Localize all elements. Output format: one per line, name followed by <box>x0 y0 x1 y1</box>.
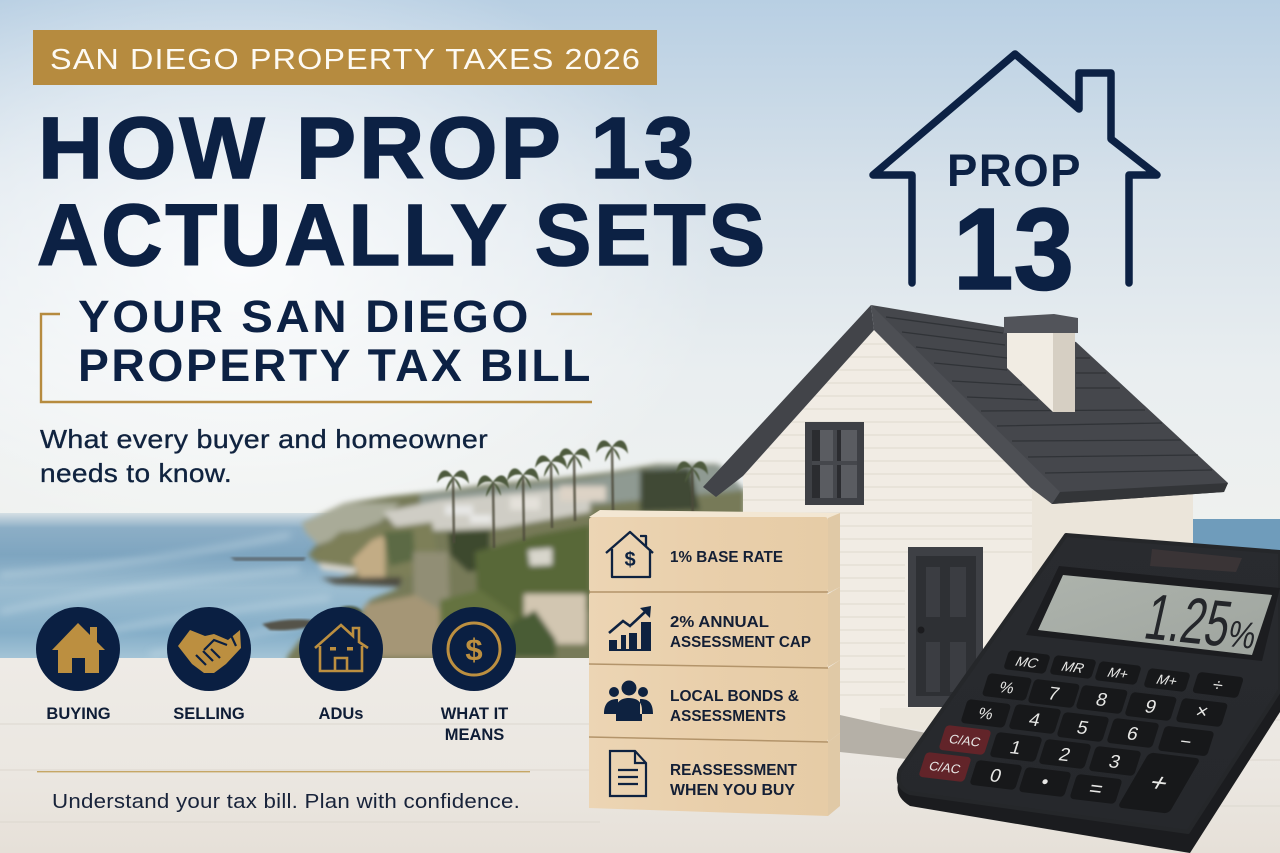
calculator keys: 1 <box>1007 738 1024 759</box>
calculator keys: C/AC <box>947 731 982 749</box>
front gable wall <box>743 330 1032 720</box>
gold bracket with subtitle <box>41 291 593 402</box>
divider <box>37 771 530 772</box>
calculator keys: MR <box>1060 658 1086 676</box>
supporting line <box>40 424 488 488</box>
calculator keys: 5 <box>1074 718 1091 739</box>
title banner: SAN DIEGO PROPERTY TAXES 2026 <box>50 44 641 76</box>
tagline: Understand your tax bill. Plan with confidence. <box>52 791 520 813</box>
gold bracket with subtitle: YOUR SAN DIEGO <box>78 291 531 342</box>
foundation step and slab <box>840 708 962 762</box>
coastline hillside <box>287 464 745 670</box>
block: 1% base rate <box>589 510 840 593</box>
icon: Prop 13 house outline <box>873 54 1157 314</box>
icon: ADUs house <box>299 607 383 691</box>
block: reassessment when you buy: WHEN YOU BUY <box>670 782 796 799</box>
calculator <box>898 535 1280 853</box>
wooden blocks stack <box>589 510 840 816</box>
calculator keys: 9 <box>1142 697 1159 718</box>
block: local bonds and assessments: LOCAL BONDS & <box>670 688 799 705</box>
calculator keys: 3 <box>1106 752 1123 773</box>
calculator keys: = <box>1086 776 1106 801</box>
calculator keys: % <box>997 679 1016 697</box>
block: 2% annual assessment cap <box>589 587 840 667</box>
calculator keys: C/AC <box>927 758 962 776</box>
label: selling: SELLING <box>173 705 245 723</box>
calculator body <box>898 535 1280 853</box>
calculator keys: • <box>1038 772 1051 793</box>
calculator keys: 6 <box>1124 724 1141 745</box>
block: local bonds and assessments: ASSESSMENTS <box>670 708 786 725</box>
block: 2% annual assessment cap: 2% ANNUAL <box>670 614 769 631</box>
calculator keys: 0 <box>987 766 1004 787</box>
main title <box>37 100 768 284</box>
block: reassessment when you buy <box>589 733 840 816</box>
label: what it means: WHAT IT <box>441 705 508 723</box>
calculator keys <box>918 650 1244 814</box>
icon: what it means dollar <box>432 607 516 691</box>
window <box>805 422 864 505</box>
calculator keys: 4 <box>1026 710 1043 731</box>
roof <box>703 305 1228 504</box>
block: reassessment when you buy: REASSESSMENT <box>670 762 798 779</box>
supporting line: needs to know. <box>40 458 232 488</box>
icon: what it means dollar: $ <box>465 632 483 667</box>
icon: Prop 13 house outline: 13 <box>953 184 1074 314</box>
label: what it means <box>441 705 508 744</box>
label: buying: BUYING <box>46 705 111 723</box>
gold bracket with subtitle: PROPERTY TAX BILL <box>78 340 593 391</box>
chimney <box>1004 314 1078 412</box>
calculator keys: 7 <box>1045 684 1062 705</box>
calculator keys: MC <box>1014 653 1041 671</box>
right side wall <box>1031 490 1193 600</box>
calculator keys: ÷ <box>1210 675 1226 695</box>
calculator keys: M+ <box>1106 664 1130 682</box>
calculator keys: × <box>1193 701 1211 723</box>
calculator keys: + <box>1143 768 1175 797</box>
icon: selling handshake <box>167 607 251 691</box>
calculator keys: 8 <box>1093 690 1110 711</box>
icon: Prop 13 house outline: PROP <box>947 145 1082 196</box>
table surface <box>0 658 1280 853</box>
supporting line: What every buyer and homeowner <box>40 424 488 454</box>
calculator display: % <box>1224 614 1260 657</box>
main title: HOW PROP 13 <box>38 100 697 197</box>
block: local bonds and assessments <box>589 660 840 742</box>
door <box>908 547 983 707</box>
calculator keys: − <box>1177 732 1194 753</box>
icon row <box>36 607 516 744</box>
calculator keys: % <box>976 705 995 723</box>
title banner <box>33 30 657 85</box>
block: 1% base rate: 1% BASE RATE <box>670 549 783 566</box>
block: 2% annual assessment cap: ASSESSMENT CAP <box>670 634 811 651</box>
main title: ACTUALLY SETS <box>37 187 768 284</box>
palm trees <box>437 440 708 548</box>
block: 1% base rate: $ <box>624 549 636 571</box>
model house <box>703 305 1228 762</box>
label: what it means: MEANS <box>445 726 504 744</box>
icon: buying <box>36 607 120 691</box>
label: ADUs: ADUs <box>319 705 363 723</box>
calculator keys: 2 <box>1056 745 1073 766</box>
calculator display: 1.25 <box>1139 580 1238 660</box>
calculator keys: M+ <box>1155 671 1179 689</box>
calculator display <box>1026 566 1280 661</box>
